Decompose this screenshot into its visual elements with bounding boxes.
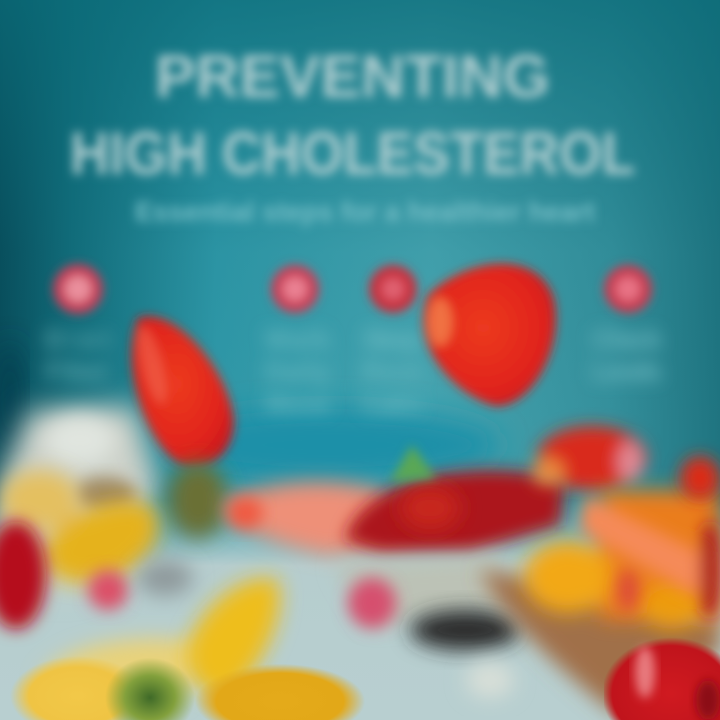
tip text one <box>45 324 110 386</box>
column: second tip <box>265 265 331 418</box>
pink berry left <box>88 570 128 610</box>
column: first tip <box>45 264 110 386</box>
red pepper upper right <box>532 426 647 490</box>
illustration: food table <box>0 264 720 720</box>
column: fourth tip <box>592 265 663 386</box>
yellow pasta upper left <box>0 470 159 582</box>
red tomato left <box>0 521 46 629</box>
tomato bottom right <box>604 626 720 720</box>
white jar <box>0 405 160 540</box>
tip text one: Diet <box>45 324 110 354</box>
tip text one: Fiber <box>45 356 110 386</box>
title: HIGH CHOLESTEROL <box>70 120 635 187</box>
red berry <box>348 578 396 628</box>
icon: red badge four <box>604 265 652 313</box>
tip text three: Sleep <box>362 324 422 354</box>
tip text two: Walk <box>265 324 331 354</box>
tip text four: Check <box>592 324 663 354</box>
tip text three: Rest <box>362 356 422 386</box>
tip text two: Daily <box>265 356 331 386</box>
tip text four <box>592 324 663 386</box>
title: PREVENTING <box>155 43 550 110</box>
tip text four: Levels <box>592 356 662 386</box>
yellow pasta bottom <box>10 578 365 720</box>
subtitle: Essential steps for a healthier heart <box>135 196 595 227</box>
basket <box>480 570 720 720</box>
icon: red badge three <box>369 265 417 313</box>
tip text two <box>265 324 331 418</box>
orange vegetables <box>524 490 720 629</box>
stem left <box>168 462 228 538</box>
column: third tip <box>362 265 422 418</box>
strawberry left <box>132 316 234 466</box>
icon: red badge one <box>53 264 103 314</box>
icon: red badge two <box>271 265 319 313</box>
title <box>70 43 635 187</box>
tip text two: Move <box>265 388 330 418</box>
table surface <box>0 490 720 720</box>
bowl of red food <box>225 445 565 625</box>
tip text three <box>362 324 422 418</box>
tip text three: Calm <box>362 388 422 418</box>
dark shadow <box>410 610 520 650</box>
strawberry large <box>423 264 556 406</box>
